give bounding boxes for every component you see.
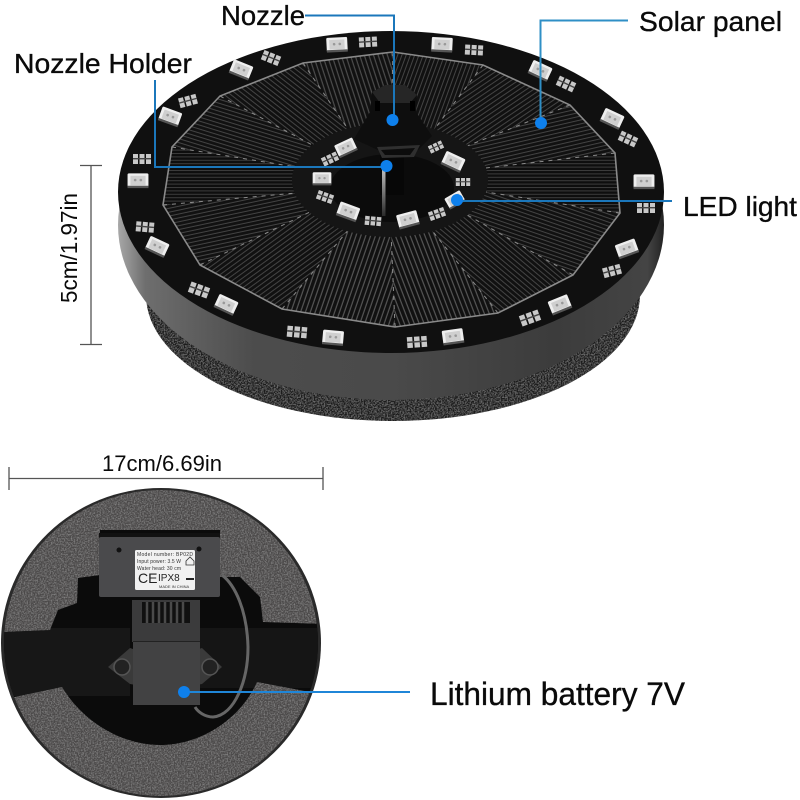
- foam base: [146, 169, 640, 421]
- spec label: Water head: 30 cm: [137, 566, 181, 572]
- housing side wall: [118, 50, 664, 400]
- height label: 5cm/1.97in: [56, 193, 82, 303]
- callout: LED light: [451, 191, 797, 222]
- callout: nozzle holder: [14, 48, 392, 172]
- mounting ears: [108, 648, 222, 685]
- label: LED light: LED light: [683, 191, 797, 222]
- label: solar panel: Solar panel: [639, 6, 782, 37]
- outer rim: [1, 488, 321, 798]
- width dimension: [9, 451, 323, 490]
- height dimension: [56, 166, 102, 344]
- spec label: IPX8: [158, 573, 180, 584]
- centre hub: [292, 123, 488, 237]
- control box: [99, 533, 220, 597]
- nozzle and holder: [354, 85, 432, 216]
- top face: [118, 31, 664, 353]
- label: lithium battery: Lithium battery 7V: [430, 676, 686, 712]
- cavity side bands: [0, 480, 330, 800]
- spec label: CE: [138, 570, 157, 586]
- spec label: MADE IN CHINA: [159, 584, 190, 589]
- lower foam: [14, 682, 310, 796]
- battery cable: [195, 575, 248, 717]
- width label: 17cm/6.69in: [102, 451, 222, 476]
- inner LED ring: [313, 137, 470, 230]
- product: fountain underside: [0, 480, 330, 800]
- spec label: [135, 550, 195, 590]
- upper foam: [4, 490, 317, 632]
- label: nozzle holder: Nozzle Holder: [14, 48, 192, 79]
- dark cavity: [4, 490, 318, 796]
- solar panel wedges: [163, 52, 620, 327]
- callout: lithium battery: [178, 676, 686, 712]
- callout: nozzle: [221, 0, 398, 126]
- label: nozzle: Nozzle: [221, 0, 305, 31]
- spec label: Model number: BP02D: [137, 552, 193, 558]
- callout: solar panel: [535, 6, 782, 129]
- spec label: Input power: 3.5 W: [137, 559, 181, 565]
- product: fountain top view: [118, 31, 664, 421]
- outer LED ring: [128, 36, 655, 349]
- battery pack: [132, 600, 200, 705]
